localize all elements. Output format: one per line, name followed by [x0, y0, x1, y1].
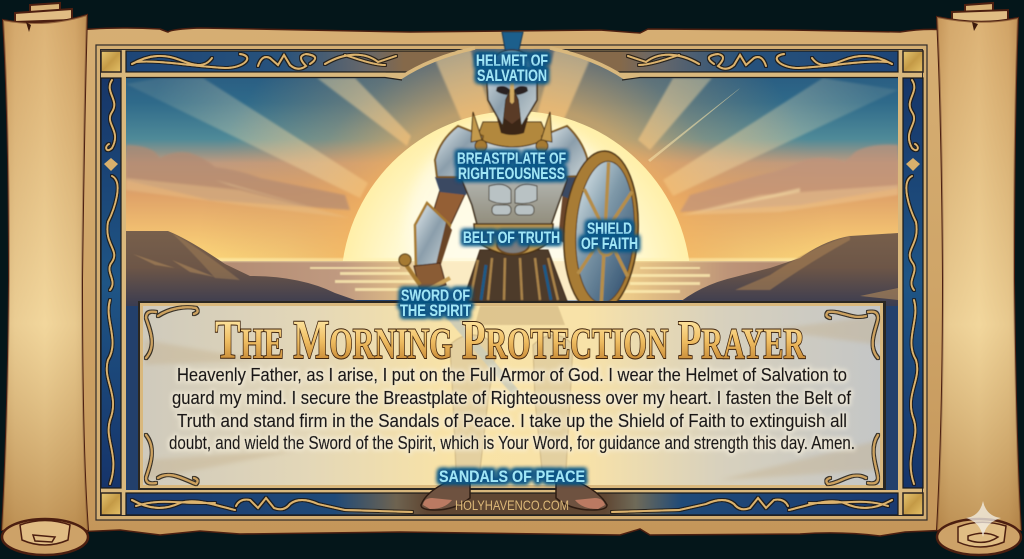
prayer text: Truth and stand firm in the Sandals of Peace. I take up the Shield of Faith to extinguish all	[177, 410, 847, 431]
website credit: HOLYHAVENCO.COM	[455, 497, 569, 513]
label: shield of faith: OF FAITH	[581, 235, 638, 253]
label: helmet of salvation: SALVATION	[477, 67, 547, 85]
faint panel clouds	[145, 315, 880, 480]
label: breastplate of righteousness: BREASTPLATE OF	[457, 150, 566, 168]
ornate frame	[96, 45, 927, 520]
bottom band ornaments	[132, 498, 892, 512]
prayer text: doubt, and wield the Sword of the Spirit, which is Your Word, for guidance and strength this day. Amen.	[169, 432, 855, 453]
hand and hilt	[414, 263, 446, 292]
right scroll	[937, 3, 1021, 555]
clouds	[126, 145, 898, 212]
armor labels	[400, 52, 638, 486]
left scroll	[2, 3, 88, 555]
text panel	[138, 301, 886, 490]
prayer text: guard my mind. I secure the Breastplate of Righteousness over my heart. I fasten the Belt of	[172, 387, 852, 408]
label: sword of the spirit: SWORD OF	[401, 287, 470, 305]
label: helmet of salvation	[476, 52, 548, 85]
collar	[477, 122, 548, 147]
sea	[220, 261, 790, 300]
bracer	[415, 203, 450, 266]
sky rays	[126, 48, 898, 198]
plume	[502, 32, 523, 54]
icon: sparkle watermark	[966, 501, 1001, 537]
prayer text	[169, 364, 855, 453]
left mountain	[126, 231, 372, 306]
top arch frame trim	[126, 48, 898, 80]
label: breastplate of righteousness	[457, 150, 566, 183]
parchment sheet	[75, 28, 950, 536]
sun	[342, 112, 690, 261]
right band	[903, 78, 923, 488]
label: helmet of salvation: HELMET OF	[476, 52, 548, 70]
soldier figure	[399, 32, 642, 315]
label: belt of truth: BELT OF TRUTH	[463, 229, 560, 247]
side vine ornaments	[106, 80, 918, 484]
skirt	[463, 250, 567, 301]
top band ornaments	[132, 54, 892, 69]
right mountain	[675, 233, 898, 306]
bottom band	[126, 493, 898, 515]
shield	[560, 149, 642, 315]
label: breastplate of righteousness: RIGHTEOUSNESS	[458, 165, 565, 183]
left band	[101, 78, 121, 488]
top band	[126, 51, 898, 72]
chainmail sleeve	[435, 177, 470, 195]
ghosted legs	[447, 306, 573, 470]
sunrise art	[126, 48, 898, 490]
left upper arm	[426, 190, 466, 245]
corner flourishes	[146, 307, 878, 484]
helmet	[487, 50, 537, 127]
sandals	[421, 478, 607, 510]
navy surround behind panel	[126, 300, 898, 490]
label: sword of the spirit: THE SPIRIT	[400, 302, 471, 320]
title: THE MORNING PROTECTION PRAYER	[215, 309, 806, 370]
label: sword of the spirit	[400, 287, 471, 320]
label: shield of faith: SHIELD	[587, 220, 632, 238]
right pauldron	[542, 126, 587, 177]
chest muscles	[489, 184, 537, 215]
sun bloom behind soldier	[405, 116, 597, 301]
prayer text: Heavenly Father, as I arise, I put on the Full Armor of God. I wear the Helmet of Salvation to	[177, 364, 847, 385]
corner tiles	[101, 51, 923, 515]
back right arm	[558, 172, 590, 250]
belt	[474, 224, 553, 255]
label: sandals of peace: SANDALS OF PEACE	[439, 468, 585, 486]
left pauldron	[435, 126, 483, 177]
label: shield of faith	[581, 220, 638, 253]
torso	[462, 135, 567, 228]
